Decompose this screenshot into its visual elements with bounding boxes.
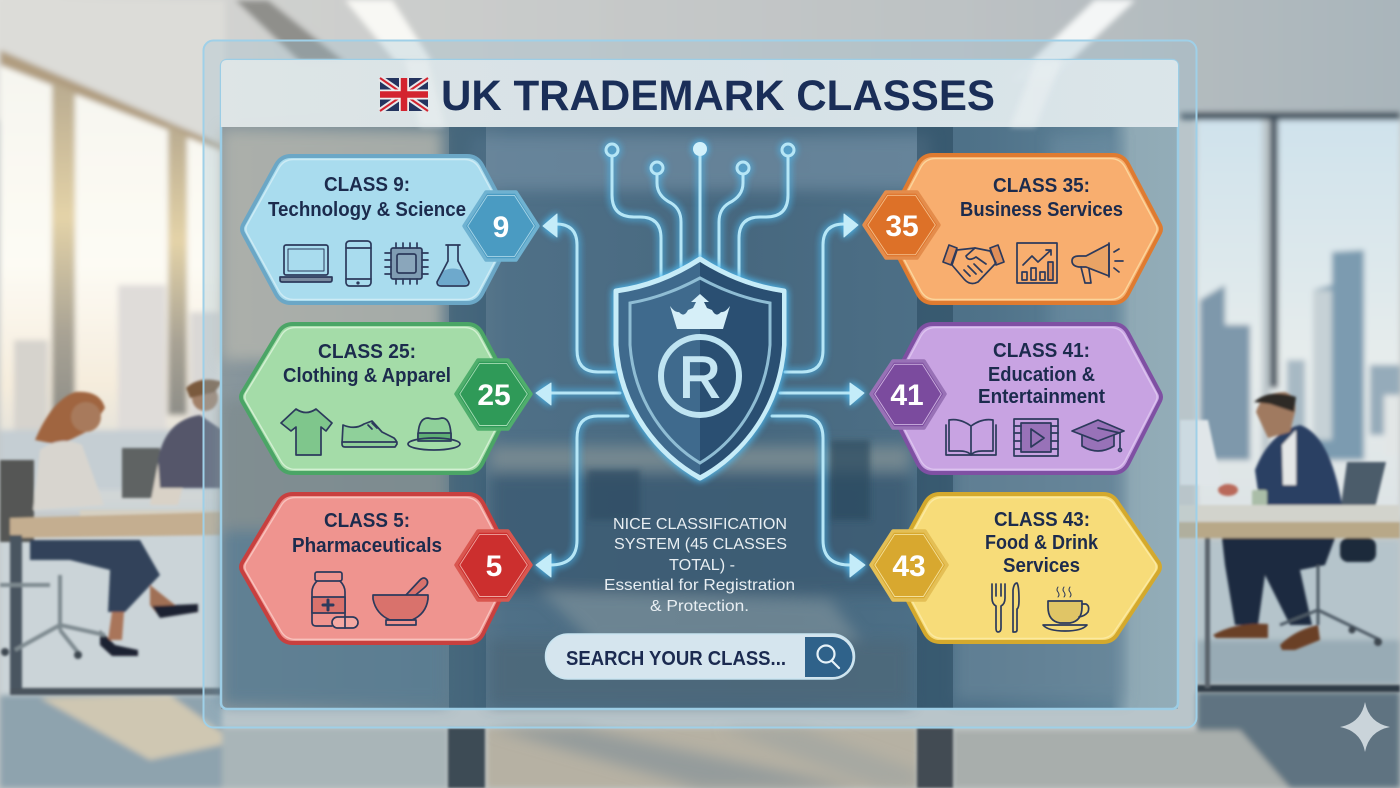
badge 9 bbox=[464, 192, 538, 260]
glass panel bbox=[204, 40, 1196, 728]
icon: mortar and pestle bbox=[373, 578, 428, 625]
arrow: to class 25 bbox=[536, 383, 620, 405]
shield emblem bbox=[616, 259, 784, 478]
icon: flask bbox=[437, 245, 469, 286]
search bar bbox=[545, 634, 855, 679]
search label: SEARCH YOUR CLASS... bbox=[566, 648, 786, 670]
subheading line one: Education & bbox=[988, 364, 1095, 386]
arrow: to class 35 bbox=[785, 214, 858, 372]
text block: Nice classification note: TOTAL) - bbox=[669, 557, 735, 574]
icon: chip bbox=[385, 243, 428, 284]
icon: registered mark bbox=[661, 337, 739, 415]
subheading: Business Services bbox=[960, 199, 1123, 221]
text block: Nice classification note: Essential for Registration bbox=[604, 577, 795, 594]
panel: class 5 bbox=[241, 494, 531, 643]
badge 25: 25 bbox=[477, 379, 511, 412]
panel: class 43 bbox=[871, 494, 1160, 642]
icon: crown bbox=[670, 294, 730, 329]
right office worker bbox=[1160, 392, 1400, 692]
left office workers bbox=[0, 380, 222, 695]
arrow: to class 43 bbox=[772, 416, 865, 577]
subheading: Pharmaceuticals bbox=[292, 535, 442, 557]
heading: CLASS 9: bbox=[324, 174, 410, 196]
badge 5 bbox=[456, 531, 531, 600]
icon: watermark star bbox=[1340, 702, 1390, 752]
heading: CLASS 35: bbox=[993, 175, 1090, 197]
icon: handshake bbox=[943, 245, 1004, 283]
text block: Nice classification note: & Protection. bbox=[650, 598, 749, 615]
icon: growth chart bbox=[1017, 243, 1057, 283]
heading: CLASS 5: bbox=[324, 510, 410, 532]
heading: CLASS 41: bbox=[993, 340, 1090, 362]
title banner bbox=[221, 60, 1178, 127]
icon: coffee cup bbox=[1043, 587, 1089, 631]
badge 43: 43 bbox=[892, 550, 926, 583]
arrow: to class 5 bbox=[536, 416, 628, 577]
icon: megaphone bbox=[1072, 243, 1123, 283]
arrow: to class 41 bbox=[780, 383, 864, 405]
circuit lines and arrows bbox=[536, 142, 865, 577]
badge 41 bbox=[871, 361, 945, 428]
arrow: to class 9 bbox=[543, 214, 615, 372]
icon: hat bbox=[408, 418, 460, 450]
subheading: Clothing & Apparel bbox=[283, 365, 451, 387]
icon: fork and knife bbox=[992, 583, 1019, 632]
badge 9: 9 bbox=[493, 211, 509, 244]
icon: shoe bbox=[342, 421, 397, 447]
icon: t-shirt bbox=[281, 409, 332, 455]
icon: film with play bbox=[1014, 419, 1058, 456]
subheading line two: Services bbox=[1003, 555, 1080, 577]
heading: CLASS 43: bbox=[994, 509, 1090, 531]
badge 5: 5 bbox=[486, 550, 502, 583]
title text: UK TRADEMARK CLASSES bbox=[441, 72, 995, 120]
badge 25 bbox=[456, 360, 531, 429]
icon: open book bbox=[946, 420, 996, 455]
subheading line two: Entertainment bbox=[978, 386, 1105, 408]
icon: magnifier bbox=[818, 646, 839, 668]
badge 43 bbox=[871, 531, 947, 600]
subheading line one: Food & Drink bbox=[985, 532, 1099, 554]
panel: class 9 bbox=[242, 156, 538, 303]
badge 35 bbox=[864, 192, 939, 258]
heading: CLASS 25: bbox=[318, 341, 416, 363]
badge 41: 41 bbox=[890, 379, 924, 412]
text block: Nice classification note bbox=[604, 516, 795, 615]
text block: Nice classification note: NICE CLASSIFICATION bbox=[613, 516, 787, 533]
icon: UK flag bbox=[380, 78, 428, 111]
subheading: Technology & Science bbox=[268, 199, 466, 221]
panel: class 25 bbox=[241, 324, 531, 473]
text block: Nice classification note: SYSTEM (45 CLASSES bbox=[614, 536, 787, 553]
icon: medicine bottle and pill bbox=[312, 572, 358, 628]
panel: class 41 bbox=[871, 324, 1161, 473]
panel: class 35 bbox=[864, 155, 1161, 303]
icon: graduation cap bbox=[1072, 420, 1124, 452]
icon: phone bbox=[346, 241, 371, 286]
icon: laptop bbox=[280, 245, 332, 282]
icon: registered mark: R bbox=[679, 345, 721, 410]
badge 35: 35 bbox=[885, 210, 919, 243]
